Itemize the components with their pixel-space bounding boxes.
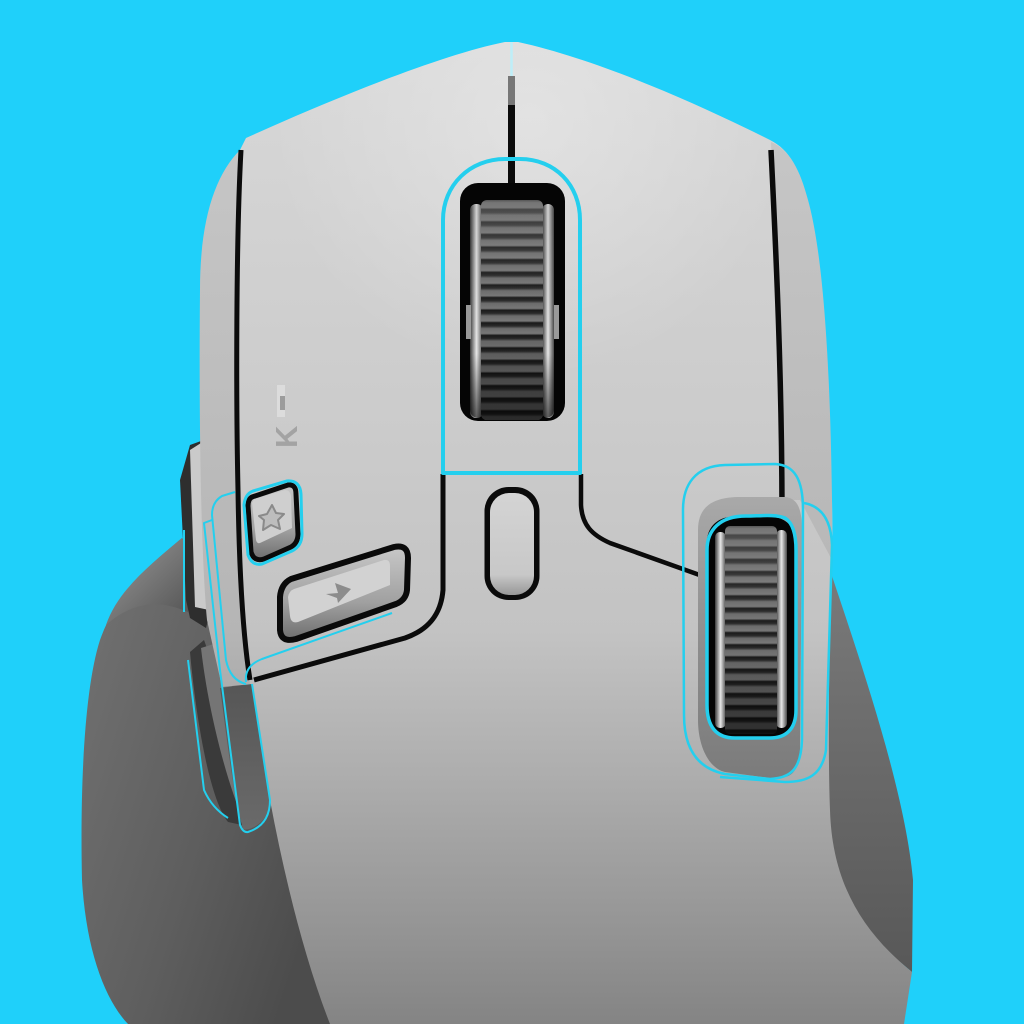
outline: thumb upper panel [212, 492, 246, 684]
left rim [470, 204, 483, 418]
outline: main wheel zone [443, 159, 580, 473]
left panel seam [254, 474, 443, 680]
faint rotated K mark: K [269, 425, 304, 448]
outline: upper side strip [183, 530, 185, 612]
outline: wheel side [720, 503, 832, 782]
star button [248, 485, 298, 560]
left rim [715, 532, 726, 728]
icon: arrow [326, 583, 351, 603]
left side strip shading [200, 150, 250, 687]
rim shading [470, 204, 554, 418]
centre seam [508, 105, 515, 190]
wheel ridges [481, 200, 543, 420]
main scroll wheel [460, 183, 565, 421]
outline: star button [244, 481, 302, 564]
right rim [776, 530, 787, 728]
faint rotated K mark [269, 385, 304, 448]
right dark wing [828, 570, 913, 972]
mouse body shell [200, 42, 912, 1024]
lower thumb panel [220, 684, 270, 829]
wheel slot [460, 183, 565, 421]
icon: star [259, 505, 284, 530]
centre oval button [484, 487, 540, 600]
wheel slot [707, 517, 796, 737]
left dark wing [82, 538, 340, 1024]
axle clips [466, 305, 471, 339]
outline: wheel zone outer [683, 464, 803, 779]
secondary scroll wheel [707, 517, 796, 737]
outline: arrow button lower edge [246, 613, 392, 682]
right side strip shading [771, 142, 832, 560]
lower side button [190, 640, 242, 825]
outline: inner wheel [707, 516, 796, 738]
top centre sheen [238, 42, 782, 400]
cyan outlines [184, 159, 832, 832]
left seam [237, 150, 250, 680]
upper side button [180, 441, 210, 628]
right seam [771, 150, 782, 516]
secondary scroll wheel well [698, 497, 802, 778]
left wing gloss [106, 538, 196, 625]
right rim [542, 204, 554, 418]
wheel ridges [725, 526, 777, 734]
seam lines [237, 42, 782, 680]
arrow button [280, 546, 408, 640]
outline: lower side strip [188, 660, 228, 818]
right panel seam [581, 474, 708, 578]
side thumb buttons [180, 441, 244, 825]
outline: thumb inner panel [204, 520, 270, 832]
